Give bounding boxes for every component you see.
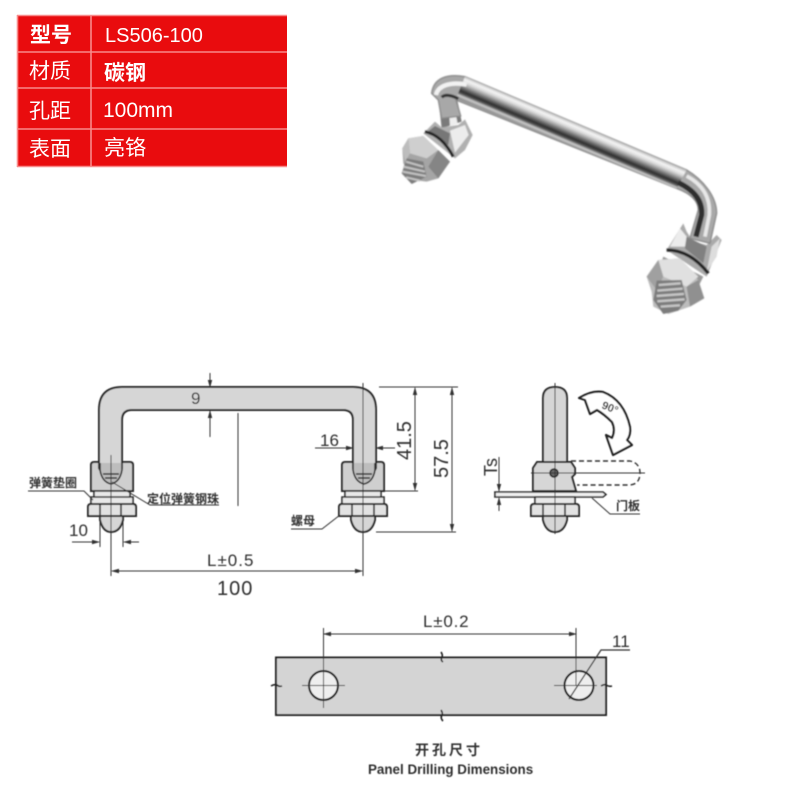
dimension labels: 41.5 bbox=[394, 421, 416, 460]
callout: door panel: 门板 bbox=[616, 498, 640, 513]
dimension labels: 9 bbox=[191, 389, 200, 408]
callout: spring steel ball: 定位弹簧钢珠 bbox=[147, 491, 219, 506]
door panel bbox=[495, 492, 606, 497]
row: surface: 亮铬 bbox=[104, 137, 146, 160]
spec table bbox=[17, 15, 287, 167]
callout: spring washer bbox=[28, 475, 93, 500]
callout: nut bbox=[291, 513, 340, 529]
dimension labels: L±0.5 bbox=[207, 551, 254, 570]
callout: spring washer: 弹簧垫圈 bbox=[29, 475, 77, 490]
row: surface bbox=[29, 137, 146, 161]
drilled plate bbox=[271, 652, 612, 721]
dimension L±0.2: 11 bbox=[612, 632, 630, 651]
callout: spring steel ball bbox=[112, 482, 219, 506]
dimension L±0.2: L±0.2 bbox=[423, 612, 469, 631]
dimension labels: 57.5 bbox=[431, 439, 453, 478]
panel drilling drawing bbox=[271, 612, 630, 777]
row: hole spacing bbox=[29, 99, 173, 123]
handle body bbox=[99, 387, 376, 466]
callout: door panel bbox=[592, 498, 640, 514]
front view drawing bbox=[28, 373, 458, 600]
right bolt assembly bbox=[647, 223, 722, 314]
row: hole spacing: 孔距 bbox=[29, 100, 71, 123]
left hole bbox=[302, 628, 345, 708]
product photo: folding handle bbox=[402, 76, 722, 314]
left bolt assembly bbox=[402, 97, 473, 184]
row: hole spacing: 100mm bbox=[103, 99, 173, 122]
dimension lines bbox=[72, 373, 458, 576]
handle stem bbox=[543, 387, 567, 462]
callout: nut: 螺母 bbox=[291, 513, 315, 528]
folded position outline bbox=[571, 461, 640, 485]
left mounting block bbox=[88, 462, 136, 532]
right hole bbox=[554, 628, 630, 700]
row: material bbox=[29, 60, 146, 85]
mounting block and pivot bbox=[533, 462, 576, 491]
caption: 开孔尺寸 bbox=[415, 742, 483, 758]
dimension labels: 10 bbox=[69, 521, 88, 540]
icon: 90 degree rotation arrow bbox=[579, 392, 632, 455]
dimension labels: 16 bbox=[320, 431, 339, 450]
dimension labels: 100 bbox=[217, 578, 253, 600]
dimension L±0.2 bbox=[324, 612, 630, 651]
caption: Panel Drilling Dimensions bbox=[368, 762, 533, 777]
nut and dome bbox=[531, 497, 579, 532]
row: surface: 表面 bbox=[29, 138, 71, 161]
polished tube bbox=[432, 76, 717, 243]
row: material: 材质 bbox=[29, 60, 71, 83]
row: model bbox=[30, 24, 203, 47]
row: model: LS506-100 bbox=[105, 25, 203, 47]
row: model: 型号 bbox=[30, 24, 72, 47]
right mounting block bbox=[339, 462, 387, 532]
center lines and thickness dimension: Ts bbox=[481, 458, 501, 476]
side view drawing bbox=[481, 383, 645, 534]
icon: 90 degree rotation arrow: 90° bbox=[600, 400, 620, 417]
caption bbox=[368, 742, 533, 777]
center lines and thickness dimension bbox=[481, 383, 645, 534]
dimension labels bbox=[69, 389, 453, 600]
row: material: 碳钢 bbox=[104, 62, 146, 85]
